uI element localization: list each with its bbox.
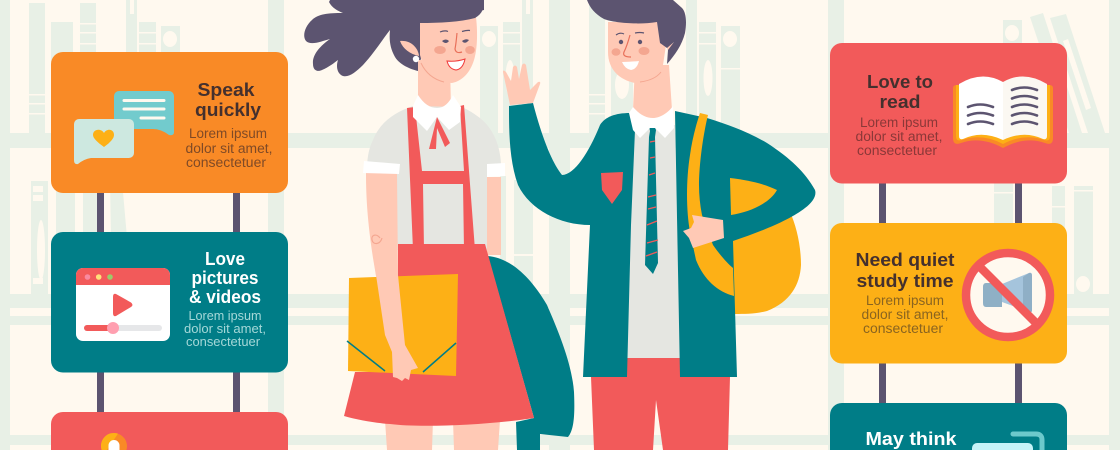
ponytail hair	[304, 0, 484, 76]
forearm over folder	[373, 250, 418, 381]
panel: may think	[830, 403, 1067, 450]
jacket right and bent arm	[675, 111, 815, 377]
hair fringe	[400, 0, 484, 44]
body text	[856, 115, 942, 158]
signpost poles right	[879, 175, 1022, 410]
panel: love to read	[830, 43, 1067, 184]
heading: may think: May think	[866, 429, 958, 449]
ear and earring	[400, 41, 419, 62]
icon: location pin	[101, 433, 127, 450]
illustration: boy	[503, 0, 815, 450]
hand on strap	[683, 215, 724, 248]
body text: Lorem ipsum	[189, 126, 267, 141]
hair	[587, 0, 686, 64]
icon: tablet	[972, 434, 1042, 450]
heading: love to read: Love to	[867, 72, 933, 92]
shirt front	[627, 125, 680, 358]
face	[608, 22, 666, 83]
illustration: girl	[304, 0, 574, 450]
body text: Lorem ipsum	[860, 115, 938, 130]
jacket crest	[601, 172, 623, 204]
body text	[862, 293, 948, 336]
body text: Lorem ipsum	[866, 293, 944, 308]
face	[420, 17, 477, 83]
body text: dolor sit amet,	[186, 141, 272, 156]
heading: love to read	[867, 72, 933, 112]
skirt	[344, 244, 534, 426]
icon: video player	[76, 268, 170, 341]
collar	[629, 106, 674, 138]
heading: love pictures and videos	[189, 249, 261, 307]
neck	[418, 60, 451, 112]
panel: red card bottom left	[51, 412, 288, 450]
icon: open book	[953, 76, 1053, 148]
body text: consectetuer	[863, 321, 944, 336]
heading: need quiet study time	[856, 250, 955, 291]
trousers	[591, 357, 730, 450]
body text	[184, 308, 266, 349]
legs	[385, 420, 500, 450]
heading: need quiet study time: Need quiet	[856, 250, 955, 270]
icon: no sound	[966, 253, 1050, 337]
jacket held by girl	[488, 256, 574, 450]
panel: speak quickly	[51, 52, 288, 193]
raised hand	[503, 64, 540, 105]
jacket left and raised arm	[509, 103, 635, 377]
heading: love pictures and videos: Love	[205, 249, 245, 269]
body text: consectetuer	[186, 334, 261, 349]
collar	[413, 95, 461, 131]
heading: love pictures and videos: pictures	[192, 268, 258, 288]
ribbon	[429, 117, 450, 149]
neck	[633, 65, 672, 125]
heading: love to read: read	[880, 92, 920, 112]
bag seen through arm	[730, 178, 777, 215]
heading: need quiet study time: study time	[856, 271, 954, 291]
arm swirl	[372, 235, 382, 244]
body text: consectetuer	[186, 155, 267, 170]
body text: consectetuer	[857, 143, 938, 158]
body text: dolor sit amet,	[856, 129, 942, 144]
sleeve cuffs	[363, 161, 505, 177]
bag strap	[687, 113, 734, 296]
icon: chat bubbles	[74, 91, 174, 164]
pinafore straps	[407, 105, 475, 250]
arms	[366, 173, 501, 381]
face details	[612, 32, 661, 82]
backpack	[690, 178, 801, 314]
body text	[186, 126, 272, 170]
body text: dolor sit amet,	[184, 321, 266, 336]
ear	[667, 42, 679, 56]
body text: dolor sit amet,	[862, 307, 948, 322]
heading: love pictures and videos: & videos	[189, 287, 261, 307]
signpost poles left	[97, 185, 240, 420]
panel: need quiet study time	[830, 223, 1067, 364]
tie	[645, 125, 658, 274]
blouse	[367, 106, 501, 250]
heading line two: quickly	[195, 100, 261, 120]
heading: speak quickly: Speak	[198, 80, 256, 100]
face details	[421, 30, 475, 82]
body text: Lorem ipsum	[188, 308, 262, 323]
yellow folder	[347, 274, 458, 376]
panel: love pictures and videos	[51, 232, 288, 372]
